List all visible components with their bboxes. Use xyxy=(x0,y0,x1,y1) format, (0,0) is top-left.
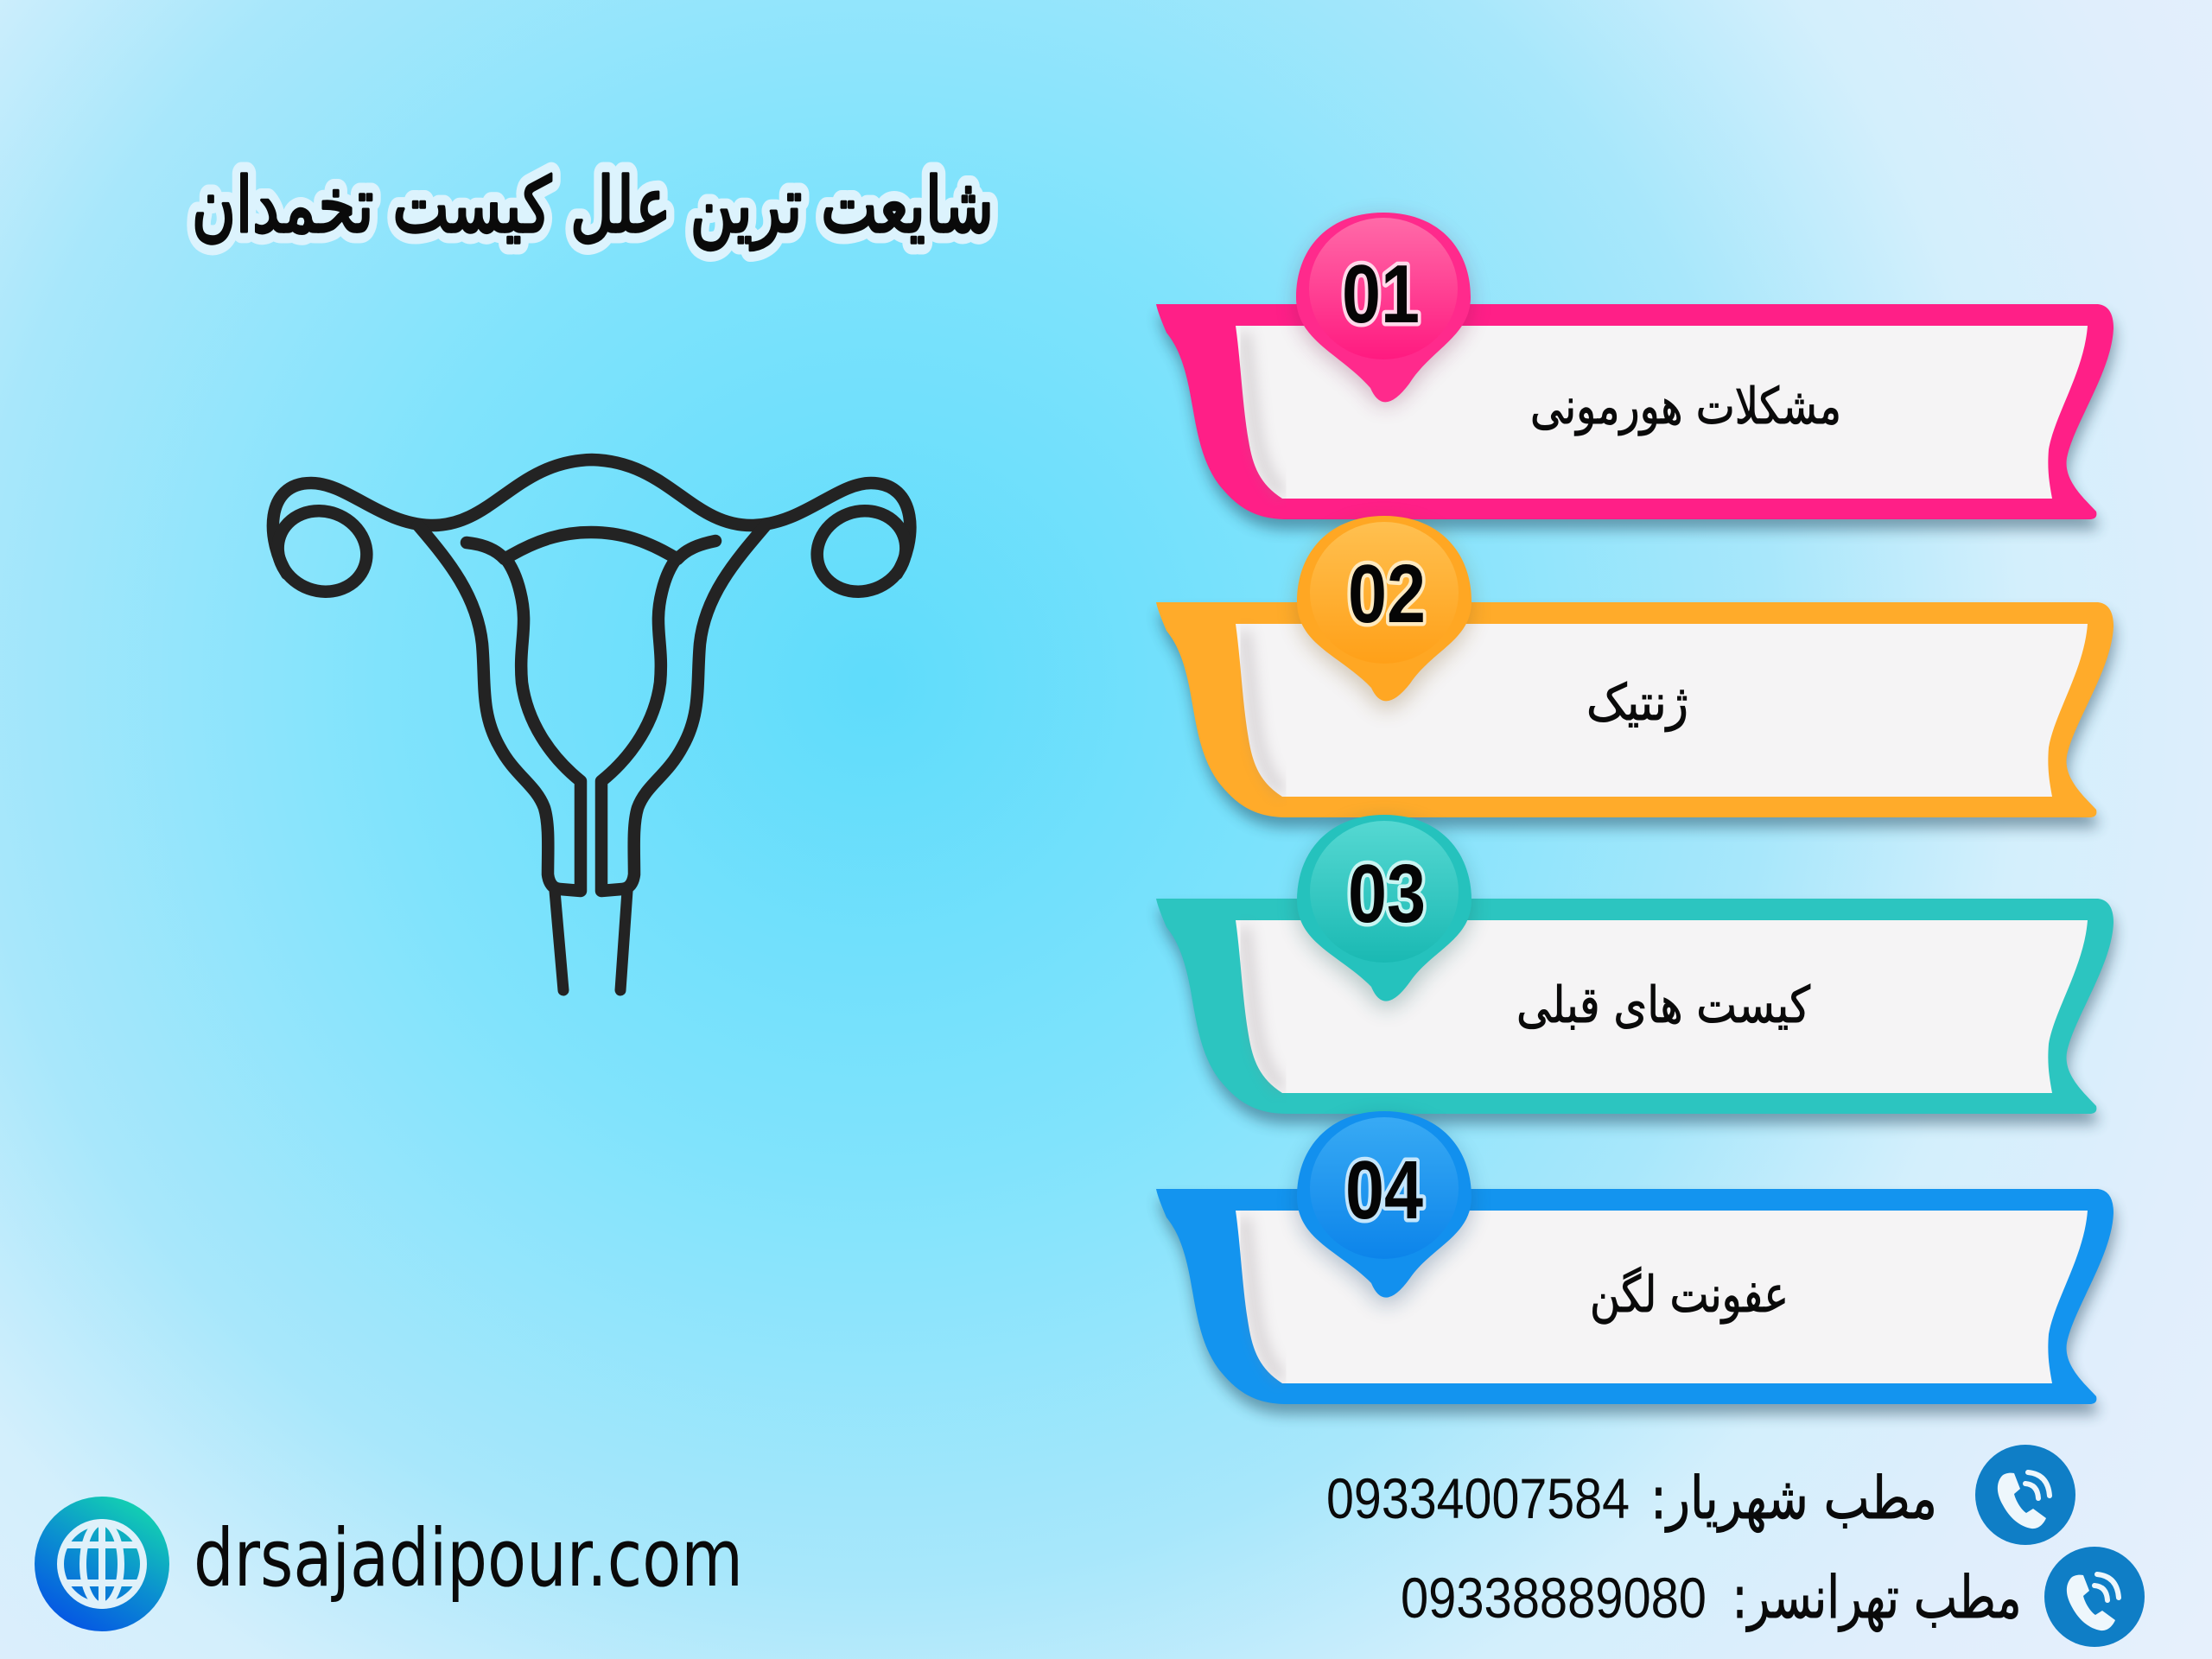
website: drsajadipour.com xyxy=(194,1512,743,1605)
panel: cause 3 xyxy=(1156,815,2115,1124)
cause 3 label: کیست های قبلی xyxy=(1516,976,1810,1034)
icon: phone 2 xyxy=(2044,1547,2145,1647)
cause 2 pin: 02 xyxy=(1348,548,1426,640)
text: clinic 2 number: 09338889080 xyxy=(1401,1566,1707,1630)
icon: globe xyxy=(35,1497,169,1631)
cause 1 label: مشکلات هورمونی xyxy=(1530,377,1841,436)
text: clinic 1 name: مطب شهریار: xyxy=(1650,1465,1937,1533)
cause 1 pin xyxy=(1296,213,1471,405)
cause 1 pin: 01 xyxy=(1342,248,1420,340)
text: clinic 2 name: مطب تهرانسر: xyxy=(1732,1564,2022,1632)
cause 2 label: ژنتیک xyxy=(1586,673,1688,732)
panel: cause 2 xyxy=(1156,516,2115,828)
panel: cause 1 xyxy=(1156,213,2115,530)
title: شایعت ترین علل کیست تخمدان xyxy=(192,161,994,251)
icon: phone 1 xyxy=(1975,1445,2075,1545)
title: شایعت ترین علل کیست تخمدان xyxy=(192,161,994,251)
icon: uterus xyxy=(266,460,918,990)
phone line 2 xyxy=(1401,1547,2145,1647)
phone line 1 xyxy=(1326,1445,2075,1545)
cause 2 pin xyxy=(1297,516,1471,709)
cause 3 pin: 03 xyxy=(1348,848,1426,940)
text: clinic 1 number: 09334007584 xyxy=(1326,1466,1630,1530)
cause 4 pin xyxy=(1297,1111,1471,1305)
panel: cause 4 xyxy=(1156,1111,2115,1414)
cause 4 pin: 04 xyxy=(1345,1144,1423,1236)
cause 4 label: عفونت لگن xyxy=(1590,1265,1789,1325)
cause 3 pin xyxy=(1297,815,1471,1008)
